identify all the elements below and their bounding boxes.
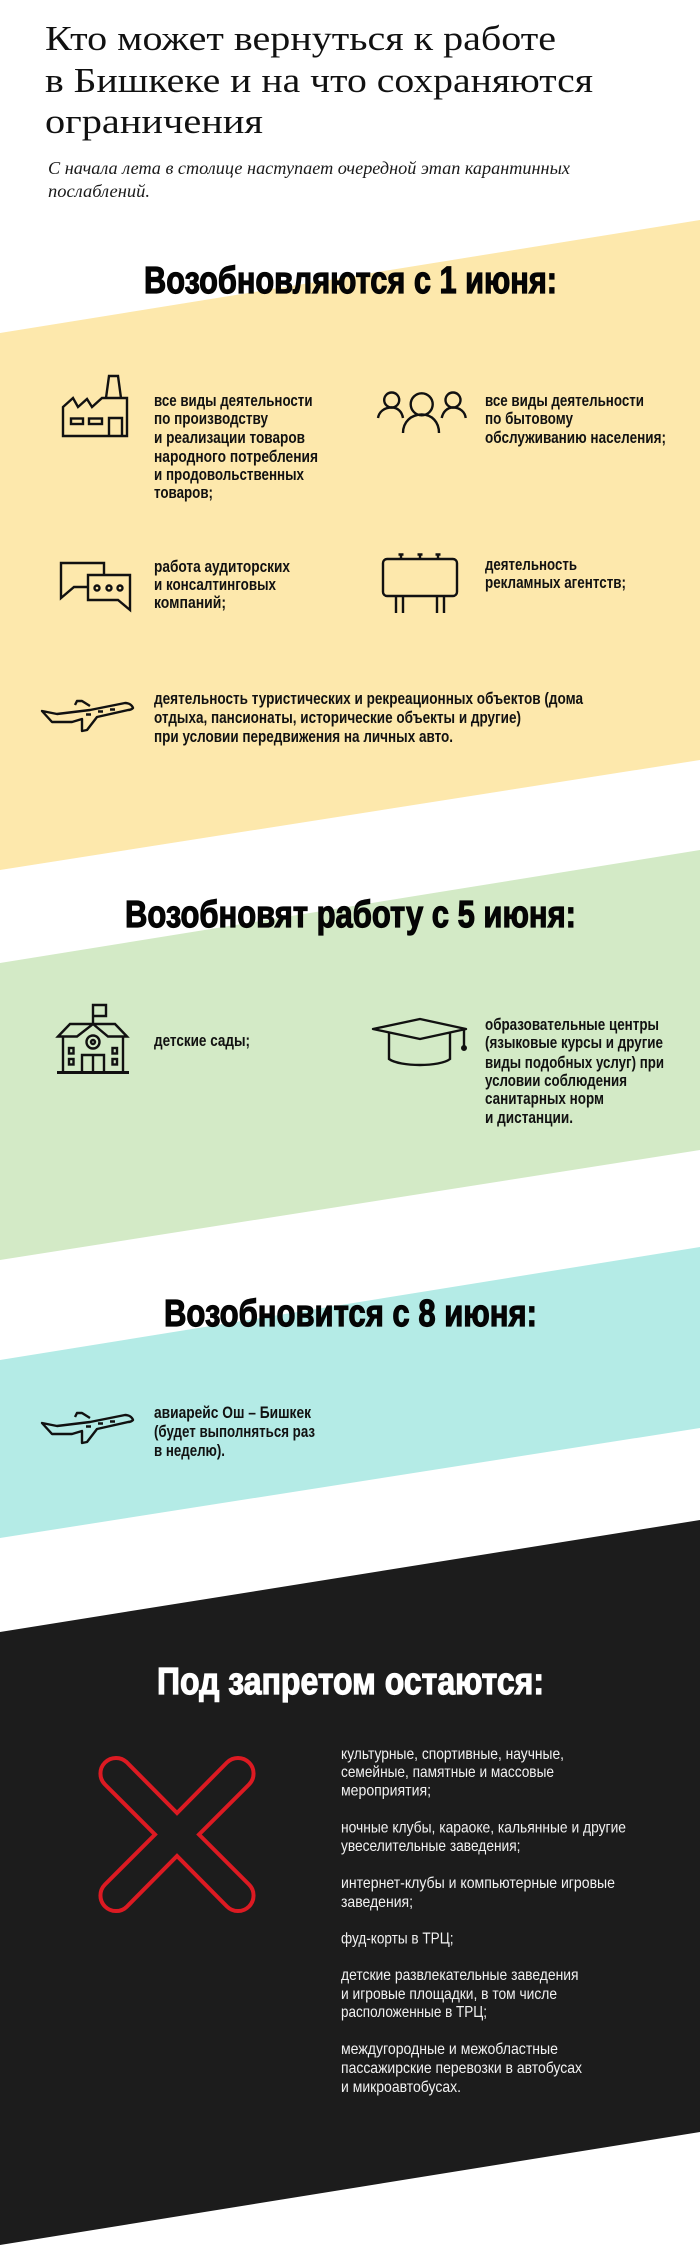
text: banned list: увеселительные заведения;: [341, 1838, 520, 1855]
text: banned list: фуд-корты в ТРЦ;: [341, 1930, 454, 1948]
text: production: [154, 392, 318, 502]
text: auditors: работа аудиторских: [154, 558, 291, 576]
text: banned list: семейные, памятные и массовые: [341, 1764, 554, 1781]
text: banned list: и микроавтобусах.: [341, 2079, 461, 2096]
panel: yellow band: [0, 220, 700, 870]
text: advertising: [485, 556, 626, 592]
icon: factory: [63, 376, 127, 436]
text: production: товаров;: [154, 484, 213, 502]
text: banned list: интернет-клубы и компьютерные игровые: [341, 1875, 615, 1892]
text: consumer services: все виды деятельности: [485, 392, 644, 410]
icon: red cross: [100, 1758, 254, 1911]
text: production: все виды деятельности: [154, 392, 312, 410]
text: banned list: пассажирские перевозки в автобусах: [341, 2060, 582, 2077]
text: banned list: детские развлекательные заведения: [341, 1967, 578, 1984]
panel: black band: [0, 1520, 700, 2245]
panel: teal band: [0, 1247, 700, 1538]
text: auditors: [154, 558, 291, 612]
text: banned list: мероприятия;: [341, 1782, 431, 1800]
subtitle: [48, 158, 570, 201]
title: Кто может вернуться к работе: [45, 19, 556, 58]
icon: school: [57, 1005, 129, 1072]
text: education centres: условии соблюдения: [485, 1072, 627, 1090]
text: production: и реализации товаров: [154, 429, 305, 447]
text: production: по производству: [154, 410, 269, 428]
title: в Бишкеке и на что сохраняются: [45, 61, 593, 100]
text: banned list: расположенные в ТРЦ;: [341, 2004, 487, 2021]
text: auditors: компаний;: [154, 594, 226, 612]
icon: airplane: [42, 701, 133, 731]
text: education centres: (языковые курсы и другие: [485, 1034, 663, 1052]
text: production: народного потребления: [154, 448, 318, 466]
icon: airplane: [42, 1413, 133, 1443]
heading: resume June 5: Возобновят работу с 5 июня:: [125, 894, 576, 936]
subtitle: С начала лета в столице наступает очередной этап карантинных: [48, 158, 570, 178]
text: banned list: [341, 1746, 626, 2096]
icon: chat bubbles: [61, 563, 130, 610]
panel: green band: [0, 850, 700, 1260]
text: production: и продовольственных: [154, 466, 305, 484]
text: auditors: и консалтинговых: [154, 576, 277, 594]
text: tourism: отдыха, пансионаты, исторические объекты и другие): [154, 709, 521, 727]
text: banned list: заведения;: [341, 1894, 413, 1911]
icon: graduation cap: [373, 1019, 466, 1065]
text: flight: авиарейс Ош – Бишкек: [154, 1404, 312, 1422]
text: tourism: деятельность туристических и рекреационных объектов (дома: [154, 690, 584, 708]
subtitle: послаблений.: [48, 181, 150, 201]
text: consumer services: по бытовому: [485, 410, 574, 428]
heading: resume June 1: Возобновляются с 1 июня:: [144, 260, 557, 302]
text: consumer services: обслуживанию населения;: [485, 429, 666, 447]
text: banned list: и игровые площадки, в том числе: [341, 1986, 557, 2003]
text: education centres: [485, 1016, 664, 1127]
text: banned list: междугородные и межобластные: [341, 2041, 558, 2058]
icon: people: [378, 392, 466, 433]
text: education centres: и дистанции.: [485, 1109, 573, 1127]
heading: resume June 8: Возобновится с 8 июня:: [164, 1293, 537, 1335]
text: tourism: [154, 690, 584, 746]
text: banned list: ночные клубы, караоке, кальянные и другие: [341, 1820, 626, 1836]
title: ограничения: [45, 102, 263, 141]
text: flight: в неделю).: [154, 1442, 225, 1460]
text: tourism: при условии передвижения на личных авто.: [154, 728, 453, 746]
text: education centres: образовательные центры: [485, 1016, 659, 1034]
title: [45, 19, 593, 141]
text: flight: (будет выполняться раз: [154, 1423, 315, 1441]
text: kindergartens: детские сады;: [154, 1032, 250, 1050]
text: flight: [154, 1404, 315, 1460]
text: banned list: культурные, спортивные, научные,: [341, 1746, 564, 1763]
icon: billboard: [383, 554, 457, 613]
text: education centres: санитарных норм: [485, 1090, 604, 1108]
heading: still banned: Под запретом остаются:: [157, 1661, 544, 1703]
text: advertising: деятельность: [485, 556, 577, 574]
text: advertising: рекламных агентств;: [485, 574, 626, 592]
text: consumer services: [485, 392, 666, 447]
